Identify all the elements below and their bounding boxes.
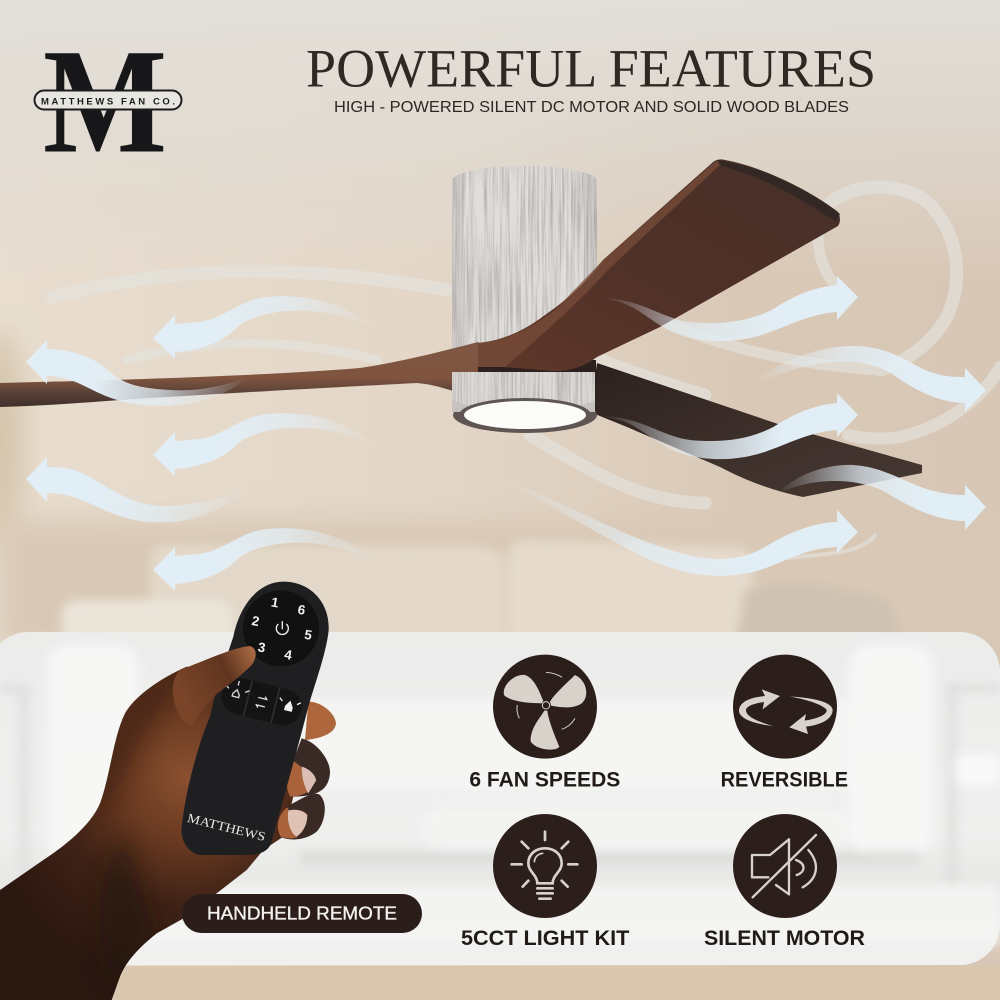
- fan canopy: [450, 160, 600, 355]
- arrow right 4: [750, 346, 986, 412]
- logo: MATTHEWS FAN CO.: [41, 96, 175, 108]
- remote control: 1: [270, 594, 280, 611]
- middle finger: [287, 738, 330, 797]
- thumb: [173, 646, 256, 727]
- faint air swirls: [52, 187, 1000, 558]
- icon: fan speeds: [493, 655, 597, 759]
- label: 5cct light kit: 5CCT LIGHT KIT: [461, 927, 630, 950]
- logo: M: [43, 18, 167, 184]
- arrow right 2: [600, 393, 858, 459]
- function buttons: [217, 674, 306, 729]
- icon: light bulb: [493, 814, 597, 918]
- airflow arrows right: [500, 276, 986, 576]
- arrow left 4: [26, 340, 247, 406]
- blurred sofa cushions: [62, 540, 905, 650]
- label: reversible: REVERSIBLE: [721, 769, 848, 792]
- arrow left 2: [153, 413, 377, 476]
- remote control: 2: [251, 613, 261, 629]
- power button: [276, 622, 288, 634]
- light kit housing: [450, 360, 600, 433]
- fingers: [278, 702, 336, 839]
- remote control: 3: [257, 639, 267, 656]
- remote control: 6: [297, 602, 307, 618]
- label: silent motor: SILENT MOTOR: [704, 927, 865, 950]
- index finger: [305, 702, 336, 740]
- hand and forearm: [0, 666, 294, 1000]
- arrow left 1: [153, 296, 377, 359]
- ceiling fan: [0, 159, 922, 497]
- feature icons: [461, 655, 865, 950]
- translucent bottom panel: [0, 632, 1000, 1000]
- handheld remote label: [182, 894, 422, 933]
- ring finger: [280, 794, 325, 839]
- arrow right 5: [777, 465, 986, 530]
- title: POWERFUL FEATURES: [306, 38, 876, 98]
- arrow right 3: [500, 478, 858, 576]
- remote brand: MATTHEWS: [186, 811, 267, 844]
- remote control: [181, 582, 329, 855]
- button disc: [243, 590, 319, 666]
- remote control: 5: [303, 627, 314, 643]
- upper right blade: [478, 159, 840, 371]
- arrow left 3: [153, 528, 377, 591]
- label: 6 fan speeds: 6 FAN SPEEDS: [469, 769, 620, 792]
- remote control: 4: [283, 647, 294, 663]
- arrow right 1: [600, 276, 858, 341]
- icon: reversible: [733, 655, 837, 759]
- arrow left 5: [26, 457, 250, 522]
- lower right blade: [590, 363, 922, 497]
- handheld remote label: HANDHELD REMOTE: [207, 902, 397, 924]
- left blade: [0, 342, 503, 407]
- hand holding remote: [0, 582, 336, 1000]
- icon: silent motor: [733, 814, 837, 918]
- airflow arrows left: [26, 296, 377, 591]
- subtitle: HIGH - POWERED SILENT DC MOTOR AND SOLID WOOD BLADES: [334, 99, 849, 116]
